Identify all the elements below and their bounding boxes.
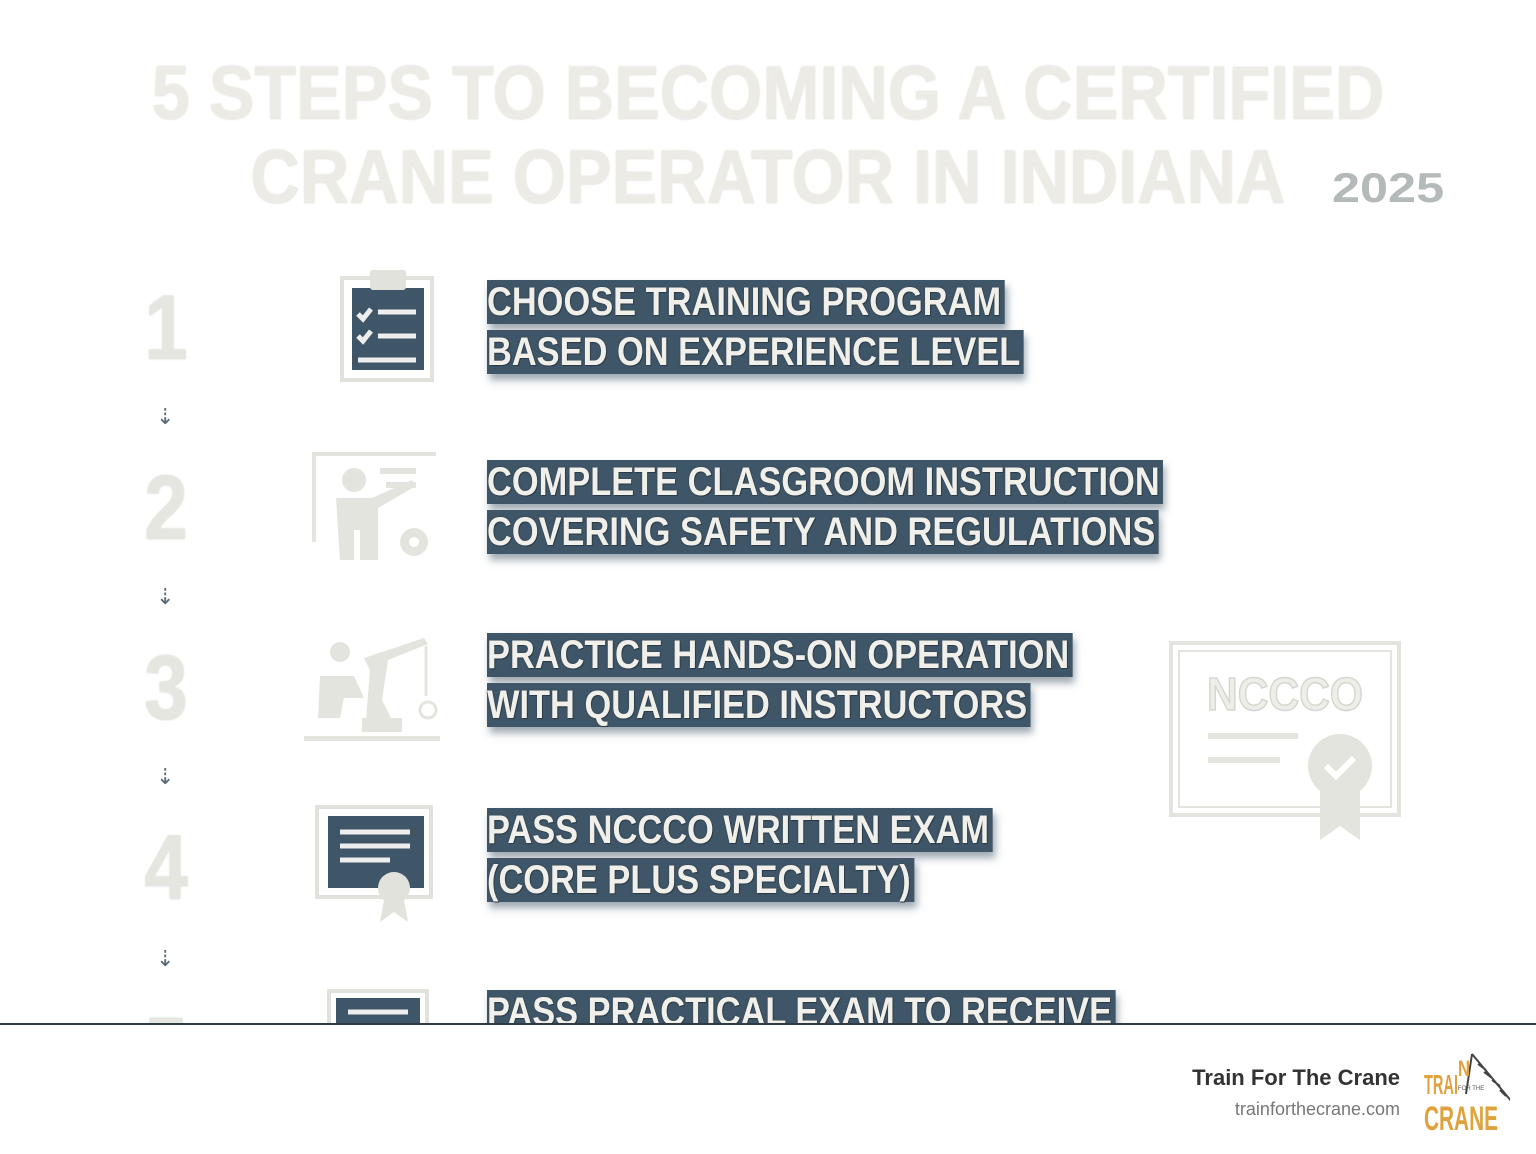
step number 2: 2 <box>144 457 188 559</box>
icon: NCCCO certificate <box>1169 641 1401 840</box>
icon: hands-on operation <box>304 638 440 741</box>
step 3 text: WITH QUALIFIED INSTRUCTORS <box>487 683 1027 727</box>
icon: NCCCO certificate: NCCCO <box>1207 668 1363 720</box>
footer brand: Train For The Crane <box>1192 1065 1400 1090</box>
step 1 text: CHOOSE TRAINING PROGRAM <box>487 280 1001 324</box>
arrow 2: ⇣ <box>156 584 174 609</box>
step number 3: 3 <box>144 637 188 739</box>
step 3 text <box>484 633 1080 738</box>
step 4 text: PASS NCCCO WRITTEN EXAM <box>487 808 989 852</box>
step 4 text: (CORE PLUS SPECIALTY) <box>487 858 911 902</box>
step 1 text <box>484 280 1031 386</box>
title: 5 STEPS TO BECOMING A CERTIFIED <box>152 51 1384 136</box>
step 2 text: COVERING SAFETY AND REGULATIONS <box>487 510 1155 554</box>
icon: clipboard <box>340 270 434 382</box>
icon: practical exam <box>327 989 429 1023</box>
logo: TRAI <box>1424 1069 1458 1100</box>
step 2 text <box>484 460 1170 566</box>
step number 4: 4 <box>144 817 188 919</box>
icon: classroom instructor <box>312 452 436 560</box>
footer divider <box>0 1023 1536 1025</box>
logo <box>1424 1053 1510 1136</box>
title: CRANE OPERATOR IN INDIANA <box>251 135 1285 220</box>
arrow 1: ⇣ <box>156 404 174 429</box>
arrow 4: ⇣ <box>156 946 174 971</box>
step 1 text: BASED ON EXPERIENCE LEVEL <box>487 330 1020 374</box>
step number 1: 1 <box>144 277 188 379</box>
step 4 text <box>484 808 1001 914</box>
step 3 text: PRACTICE HANDS-ON OPERATION <box>487 633 1069 677</box>
logo: FOR THE <box>1458 1086 1484 1092</box>
footer brand: trainforthecrane.com <box>1235 1099 1400 1119</box>
step 2 text: COMPLETE CLASGROOM INSTRUCTION <box>487 460 1160 504</box>
year: 2025 <box>1332 164 1444 211</box>
arrow 3: ⇣ <box>156 764 174 789</box>
logo: N <box>1458 1056 1470 1081</box>
icon: written exam certificate <box>315 805 433 922</box>
title <box>152 51 1384 220</box>
footer brand <box>1192 1065 1400 1119</box>
